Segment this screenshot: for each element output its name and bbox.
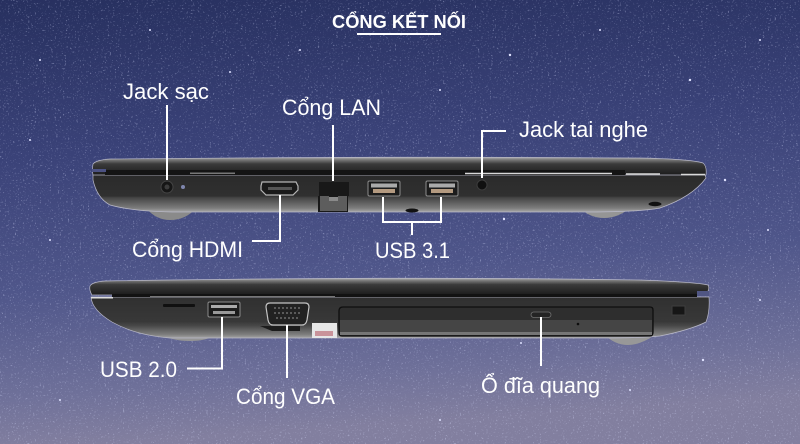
- icon: HDMI port: [261, 182, 298, 195]
- icon: headphone jack: [477, 180, 487, 190]
- foot right: [580, 208, 630, 218]
- icon: VGA port: [260, 303, 309, 331]
- icon: lock slot: [672, 306, 685, 315]
- rubber holes: [406, 208, 418, 212]
- foot left: [146, 208, 196, 220]
- label: USB 2.0: [100, 317, 222, 382]
- label: Jack sạc: Jack sạc: [123, 79, 209, 104]
- label: Ổ đĩa quang: [481, 317, 600, 398]
- laptop: front side view with ports: [90, 278, 709, 345]
- foot left: [160, 334, 216, 341]
- label: Cổng VGA: Cổng VGA: [236, 384, 335, 409]
- label: Cổng HDMI: Cổng HDMI: [132, 237, 243, 262]
- label: USB 3.1: [375, 197, 450, 263]
- label: USB 2.0: USB 2.0: [100, 357, 177, 382]
- label: Cổng HDMI: [132, 195, 280, 262]
- lid: [92, 157, 706, 175]
- sticker: [312, 323, 337, 338]
- icon: optical drive: [339, 307, 653, 336]
- icon: LAN port: [318, 182, 349, 212]
- label: USB 3.1: USB 3.1: [375, 238, 450, 263]
- laptop: rear side view with ports: [92, 157, 706, 220]
- label: Cổng LAN: [282, 95, 381, 181]
- icon: USB 2.0 port: [208, 302, 240, 317]
- hinge gap: [105, 170, 625, 175]
- lid: [90, 278, 709, 295]
- label: Cổng LAN: Cổng LAN: [282, 95, 381, 120]
- icon: USB 3.1 left port: [368, 181, 400, 196]
- title: CỔNG KẾT NỐI: [332, 11, 466, 32]
- icon: charging jack: [161, 181, 185, 193]
- label: Jack tai nghe: Jack tai nghe: [519, 117, 648, 142]
- light trim strips: [465, 174, 705, 175]
- label: Cổng VGA: [236, 325, 335, 409]
- lower case: [91, 297, 709, 338]
- lower case: [93, 172, 706, 212]
- hinge gap: [112, 294, 697, 297]
- foot right: [605, 335, 655, 345]
- label: Jack tai nghe: [482, 117, 648, 178]
- icon: USB 3.1 right port: [426, 181, 458, 196]
- label: Ổ đĩa quang: Ổ đĩa quang: [481, 373, 600, 398]
- label: Jack sạc: [123, 79, 209, 180]
- icon: SD card slot: [163, 304, 195, 307]
